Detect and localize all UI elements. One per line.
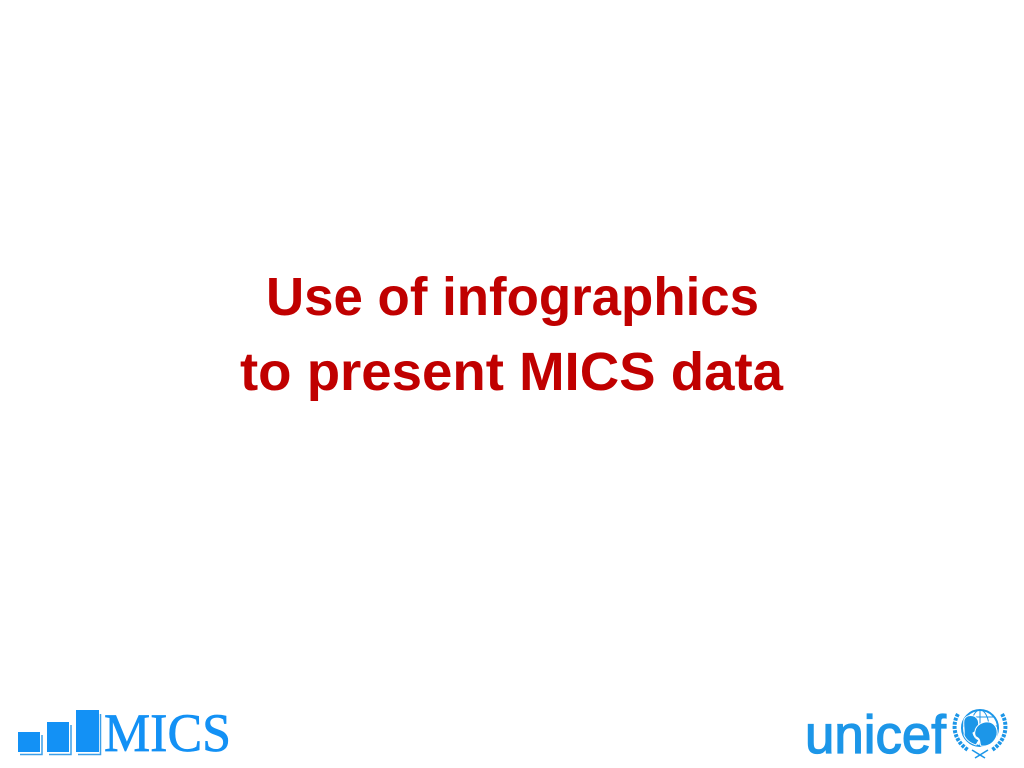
unicef wordmark: unicef — [805, 705, 947, 765]
icon: unicef emblem — [955, 710, 1005, 758]
wreath ribbon — [972, 750, 988, 758]
logo: unicef — [805, 705, 1005, 765]
MICS wordmark: MICS — [104, 703, 231, 763]
title — [240, 267, 784, 402]
icon: MICS rising bars — [18, 710, 100, 754]
title: to present MICS data — [240, 342, 784, 402]
title: Use of infographics — [266, 267, 759, 327]
parent and child figures — [964, 716, 997, 746]
globe — [962, 710, 998, 746]
wreath — [955, 714, 1005, 750]
logo: MICS — [18, 703, 231, 763]
